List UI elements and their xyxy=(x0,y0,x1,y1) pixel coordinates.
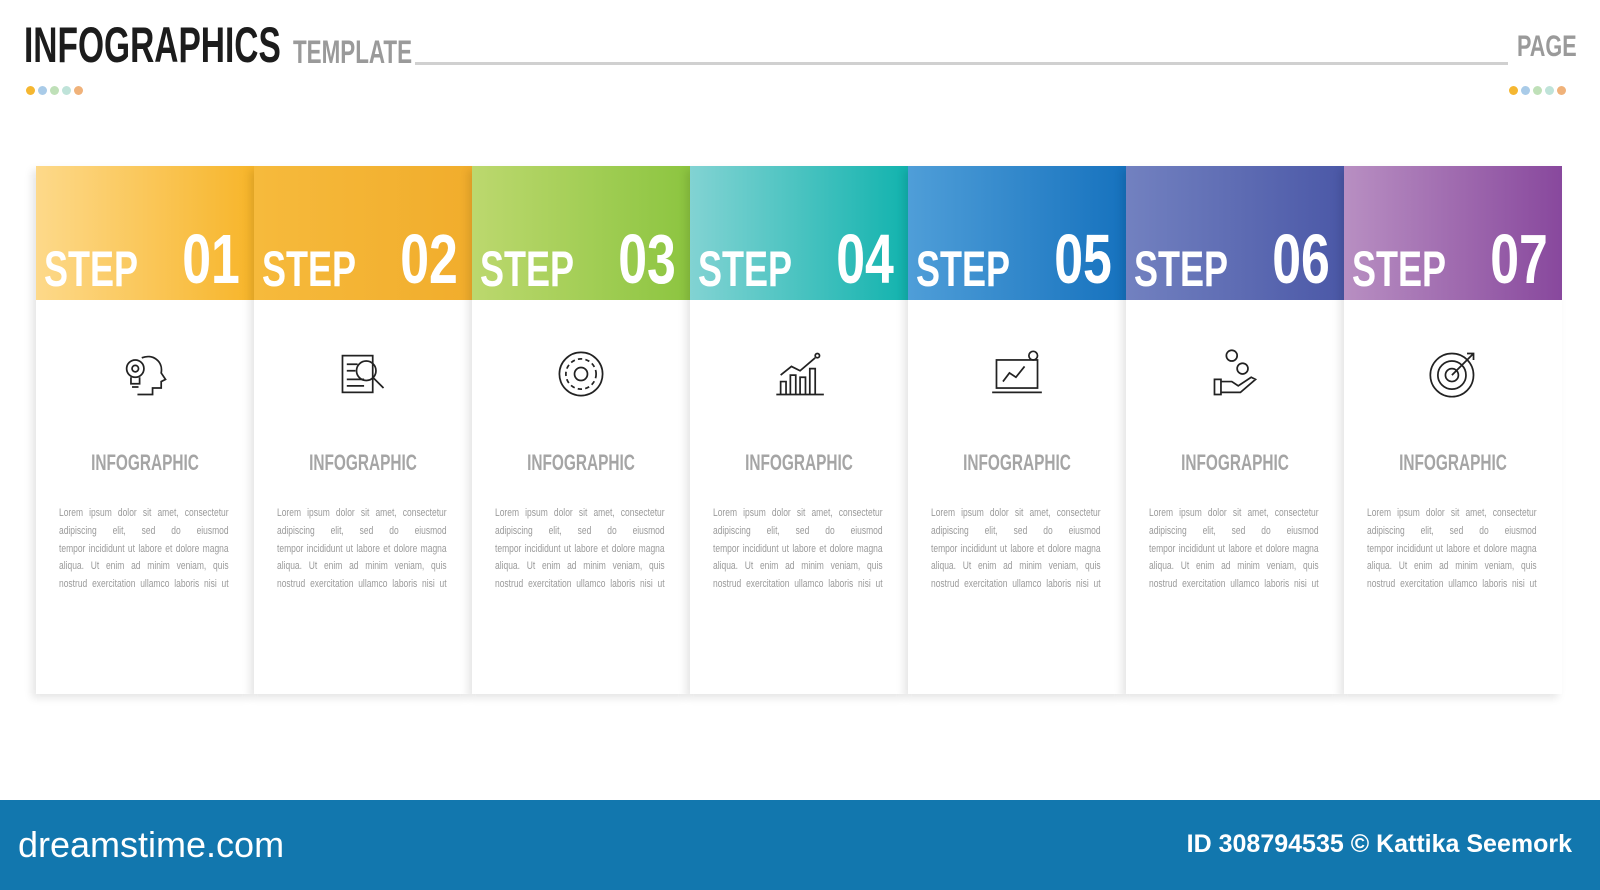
icon: gear cycle xyxy=(558,352,604,396)
text 01: aliqua. Ut enim ad minim veniam, quis xyxy=(59,560,229,572)
text 03: adipiscing elit, sed do eiusmod xyxy=(495,525,665,537)
text 03: nostrud exercitation ullamco laboris nisi ut xyxy=(495,578,665,590)
heading 04: INFOGRAPHIC xyxy=(745,450,853,475)
header band 06 xyxy=(1126,166,1344,300)
header band 05: 05 xyxy=(1054,220,1112,298)
text 03: Lorem ipsum dolor sit amet, consectetur xyxy=(495,507,665,519)
header band 01: 01 xyxy=(182,220,240,298)
text 03: aliqua. Ut enim ad minim veniam, quis xyxy=(495,560,665,572)
panel: step 04 xyxy=(690,166,908,694)
text 02: nostrud exercitation ullamco laboris nisi ut xyxy=(277,578,447,590)
text 04: Lorem ipsum dolor sit amet, consectetur xyxy=(713,507,883,519)
text 01: tempor incididunt ut labore et dolore magna xyxy=(59,543,229,555)
text 06: aliqua. Ut enim ad minim veniam, quis xyxy=(1149,560,1319,572)
header band 04: 04 xyxy=(836,220,894,298)
header band 01: STEP xyxy=(44,241,138,297)
text 04 xyxy=(713,507,883,590)
header band 02: 02 xyxy=(400,220,458,298)
text 07: adipiscing elit, sed do eiusmod xyxy=(1367,525,1537,537)
text 05 xyxy=(931,507,1101,590)
header band 05 xyxy=(908,166,1126,300)
text 02: tempor incididunt ut labore et dolore magna xyxy=(277,543,447,555)
header band 03: STEP xyxy=(480,241,574,297)
text 03 xyxy=(495,507,665,590)
panel: step 03 xyxy=(472,166,690,694)
header band 07: 07 xyxy=(1490,220,1548,298)
text 01 xyxy=(59,507,229,590)
dots left xyxy=(26,86,83,95)
text 03: tempor incididunt ut labore et dolore magna xyxy=(495,543,665,555)
icon: laptop presentation xyxy=(992,350,1042,394)
heading 07: INFOGRAPHIC xyxy=(1399,450,1507,475)
text 06: tempor incididunt ut labore et dolore magna xyxy=(1149,543,1319,555)
text 02: aliqua. Ut enim ad minim veniam, quis xyxy=(277,560,447,572)
text 07: nostrud exercitation ullamco laboris nisi ut xyxy=(1367,578,1537,590)
text 02 xyxy=(277,507,447,590)
header band 06: STEP xyxy=(1134,241,1228,297)
header band 04: STEP xyxy=(698,241,792,297)
text 01: adipiscing elit, sed do eiusmod xyxy=(59,525,229,537)
heading 01: INFOGRAPHIC xyxy=(91,450,199,475)
panel: step 01 xyxy=(36,166,254,694)
text 04: aliqua. Ut enim ad minim veniam, quis xyxy=(713,560,883,572)
icon: bar chart xyxy=(776,352,824,396)
text 07: Lorem ipsum dolor sit amet, consectetur xyxy=(1367,507,1537,519)
text 05: nostrud exercitation ullamco laboris nisi ut xyxy=(931,578,1101,590)
heading 03: INFOGRAPHIC xyxy=(527,450,635,475)
text 07: tempor incididunt ut labore et dolore magna xyxy=(1367,543,1537,555)
icon: document magnifier xyxy=(342,354,384,394)
header band 03: 03 xyxy=(618,220,676,298)
text 04: adipiscing elit, sed do eiusmod xyxy=(713,525,883,537)
text 04: tempor incididunt ut labore et dolore magna xyxy=(713,543,883,555)
icon: head lightbulb xyxy=(126,356,167,396)
heading 05: INFOGRAPHIC xyxy=(963,450,1071,475)
text 01: Lorem ipsum dolor sit amet, consectetur xyxy=(59,507,229,519)
text 06: Lorem ipsum dolor sit amet, consectetur xyxy=(1149,507,1319,519)
text 01: nostrud exercitation ullamco laboris nisi ut xyxy=(59,578,229,590)
icon: target xyxy=(1429,352,1474,398)
page label: PAGE xyxy=(1517,30,1577,63)
header band 02: STEP xyxy=(262,241,356,297)
footer xyxy=(0,800,1600,890)
header band 05: STEP xyxy=(916,241,1010,297)
header band 06: 06 xyxy=(1272,220,1330,298)
header band 07: STEP xyxy=(1352,241,1446,297)
header band 04 xyxy=(690,166,908,300)
text 04: nostrud exercitation ullamco laboris nisi ut xyxy=(713,578,883,590)
panel: step 05 xyxy=(908,166,1126,694)
text 02: Lorem ipsum dolor sit amet, consectetur xyxy=(277,507,447,519)
text 05: aliqua. Ut enim ad minim veniam, quis xyxy=(931,560,1101,572)
header band 01 xyxy=(36,166,254,300)
subtitle: template: TEMPLATE xyxy=(293,34,412,70)
text 07: aliqua. Ut enim ad minim veniam, quis xyxy=(1367,560,1537,572)
dots right xyxy=(1509,86,1566,95)
header band 03 xyxy=(472,166,690,300)
text 02: adipiscing elit, sed do eiusmod xyxy=(277,525,447,537)
header band 07 xyxy=(1344,166,1562,300)
heading 06: INFOGRAPHIC xyxy=(1181,450,1289,475)
text 05: Lorem ipsum dolor sit amet, consectetur xyxy=(931,507,1101,519)
footer credit: ID 308794535 © Kattika Seemork xyxy=(1187,830,1572,858)
title: INFOGRAPHICS xyxy=(24,17,281,73)
text 06: adipiscing elit, sed do eiusmod xyxy=(1149,525,1319,537)
footer logo: dreamstime.com xyxy=(18,824,284,865)
header band 02 xyxy=(254,166,472,300)
text 06: nostrud exercitation ullamco laboris nisi ut xyxy=(1149,578,1319,590)
heading 02: INFOGRAPHIC xyxy=(309,450,417,475)
panel: step 07 xyxy=(1344,166,1562,694)
panel: step 02 xyxy=(254,166,472,694)
text 05: adipiscing elit, sed do eiusmod xyxy=(931,525,1101,537)
text 06 xyxy=(1149,507,1319,590)
text 07 xyxy=(1367,507,1537,590)
icon: hand with coins xyxy=(1214,349,1257,396)
panel: step 06 xyxy=(1126,166,1344,694)
text 05: tempor incididunt ut labore et dolore magna xyxy=(931,543,1101,555)
